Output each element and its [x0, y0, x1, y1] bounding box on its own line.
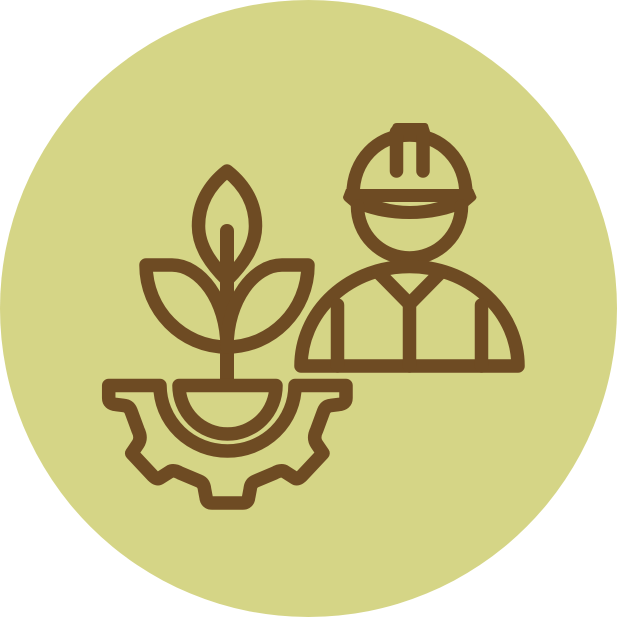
left leaf — [146, 265, 227, 347]
gear half — [109, 386, 346, 503]
right leaf — [227, 265, 308, 347]
face — [358, 206, 462, 258]
torso with safety vest — [301, 266, 518, 366]
pot half disc — [179, 386, 276, 434]
hard hat — [343, 123, 476, 219]
icon: plant growing from gear — [109, 171, 346, 503]
stem — [220, 231, 234, 385]
icon: worker with hard hat — [301, 123, 518, 366]
top leaf — [198, 171, 256, 280]
